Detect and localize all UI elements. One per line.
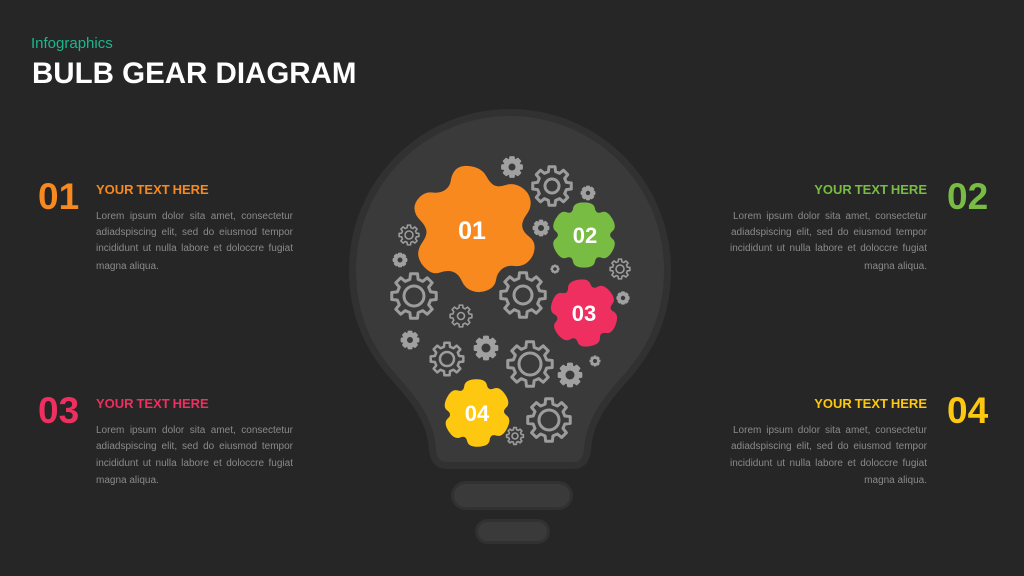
pink gear 03: 03 xyxy=(572,301,596,326)
yellow gear 04 xyxy=(443,378,511,448)
outline gears xyxy=(392,167,630,444)
body text 01: magna aliqua. xyxy=(96,261,159,272)
body text 04: Lorem ipsum dolor sita amet, consectetur xyxy=(733,425,927,436)
body text 02: adiadspiscing elit, sed do eiusmod tempor xyxy=(731,227,927,238)
orange gear 01 xyxy=(414,166,535,292)
body text 03: incididunt ut nulla labore et doloccre fugiat xyxy=(96,458,293,469)
number 04: 04 xyxy=(947,390,988,431)
heading 02: YOUR TEXT HERE xyxy=(814,182,927,197)
body text 03: magna aliqua. xyxy=(96,475,159,486)
orange gear 01: 01 xyxy=(458,217,486,245)
heading 03: YOUR TEXT HERE xyxy=(96,396,209,410)
body text 02 xyxy=(730,211,927,272)
bulb base upper pill xyxy=(452,482,572,508)
panel: item 03 xyxy=(38,390,293,486)
bulb glass xyxy=(352,112,668,466)
yellow gear 04: 04 xyxy=(465,401,490,426)
panel: item 04 xyxy=(730,390,988,486)
title: BULB GEAR DIAGRAM xyxy=(32,57,356,90)
body text 04: magna aliqua. xyxy=(864,475,927,486)
eyebrow label: Infographics xyxy=(31,35,113,52)
number 01: 01 xyxy=(38,176,79,217)
body text 04: adiadspiscing elit, sed do eiusmod tempor xyxy=(731,441,927,452)
number 03: 03 xyxy=(38,390,79,431)
pink gear 03 xyxy=(547,274,621,352)
heading 04: YOUR TEXT HERE xyxy=(814,396,927,410)
body text 03: adiadspiscing elit, sed do eiusmod tempor xyxy=(96,441,293,452)
body text 04 xyxy=(730,425,927,486)
body text 02: magna aliqua. xyxy=(864,261,927,272)
body text 04: incididunt ut nulla labore et doloccre fugiat xyxy=(730,458,927,469)
body text 01: Lorem ipsum dolor sita amet, consectetur xyxy=(96,211,293,222)
green gear 02: 02 xyxy=(573,223,597,248)
body text 03: Lorem ipsum dolor sita amet, consectetur xyxy=(96,425,293,436)
bulb base lower pill xyxy=(476,520,548,542)
body text 01: adiadspiscing elit, sed do eiusmod tempor xyxy=(96,227,293,238)
panel: item 02 xyxy=(730,176,988,272)
body text 01 xyxy=(96,211,293,272)
body text 02: incididunt ut nulla labore et doloccre fugiat xyxy=(730,243,927,254)
body text 01: incididunt ut nulla labore et doloccre fugiat xyxy=(96,243,293,254)
heading 01: YOUR TEXT HERE xyxy=(96,182,209,197)
solid gears xyxy=(394,157,628,386)
panel: item 01 xyxy=(38,176,293,272)
green gear 02 xyxy=(553,202,615,268)
body text 02: Lorem ipsum dolor sita amet, consectetur xyxy=(733,211,927,222)
body text 03 xyxy=(96,425,293,486)
number 02: 02 xyxy=(947,176,988,217)
